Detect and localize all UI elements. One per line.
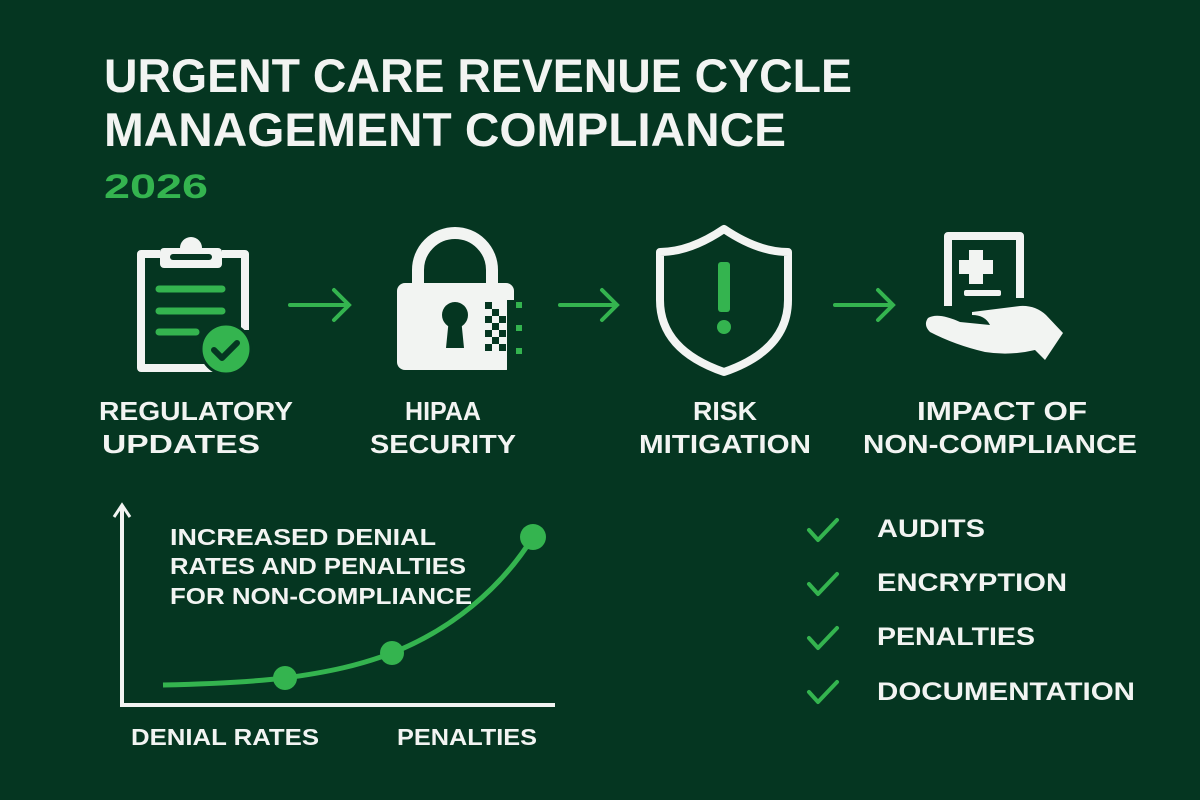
arrow 1 — [290, 290, 349, 320]
arrow 2 — [560, 290, 617, 320]
label: risk mitigation: MITIGATION — [639, 429, 811, 459]
labels row — [99, 396, 1137, 459]
checklist: PENALTIES — [877, 623, 1035, 651]
label: regulatory updates: UPDATES — [102, 429, 260, 459]
label: impact of non-compliance — [863, 396, 1137, 459]
chart annotation: INCREASED DENIAL — [170, 524, 436, 550]
chart annotation: FOR NON-COMPLIANCE — [170, 583, 472, 609]
label: impact of non-compliance: NON-COMPLIANCE — [863, 429, 1137, 459]
subtitle year: 2026 — [104, 168, 208, 206]
icon: shield — [660, 229, 788, 372]
checklist — [809, 515, 1135, 706]
icon: padlock — [397, 233, 522, 370]
label: regulatory updates: REGULATORY — [99, 396, 293, 426]
title: URGENT CARE REVENUE CYCLE — [104, 49, 852, 102]
chart annotation — [170, 524, 472, 609]
icon: clipboard — [141, 237, 251, 374]
axis labels: DENIAL RATES — [131, 724, 319, 750]
arrow 3 — [835, 290, 893, 320]
chart annotation: RATES AND PENALTIES — [170, 553, 466, 579]
label: risk mitigation — [639, 396, 811, 459]
axis labels — [131, 724, 537, 750]
label: regulatory updates — [99, 396, 293, 459]
label: hipaa security — [370, 396, 516, 459]
label: hipaa security: HIPAA — [405, 396, 481, 426]
line chart — [114, 505, 555, 750]
checklist: ENCRYPTION — [877, 569, 1067, 597]
checklist: AUDITS — [877, 515, 985, 543]
label: hipaa security: SECURITY — [370, 429, 516, 459]
label: risk mitigation: RISK — [693, 396, 757, 426]
title — [104, 49, 852, 156]
label: impact of non-compliance: IMPACT OF — [917, 396, 1087, 426]
title: MANAGEMENT COMPLIANCE — [104, 103, 786, 156]
checklist: DOCUMENTATION — [877, 678, 1135, 706]
icon: hand with medical document — [926, 236, 1063, 360]
axis labels: PENALTIES — [397, 724, 537, 750]
